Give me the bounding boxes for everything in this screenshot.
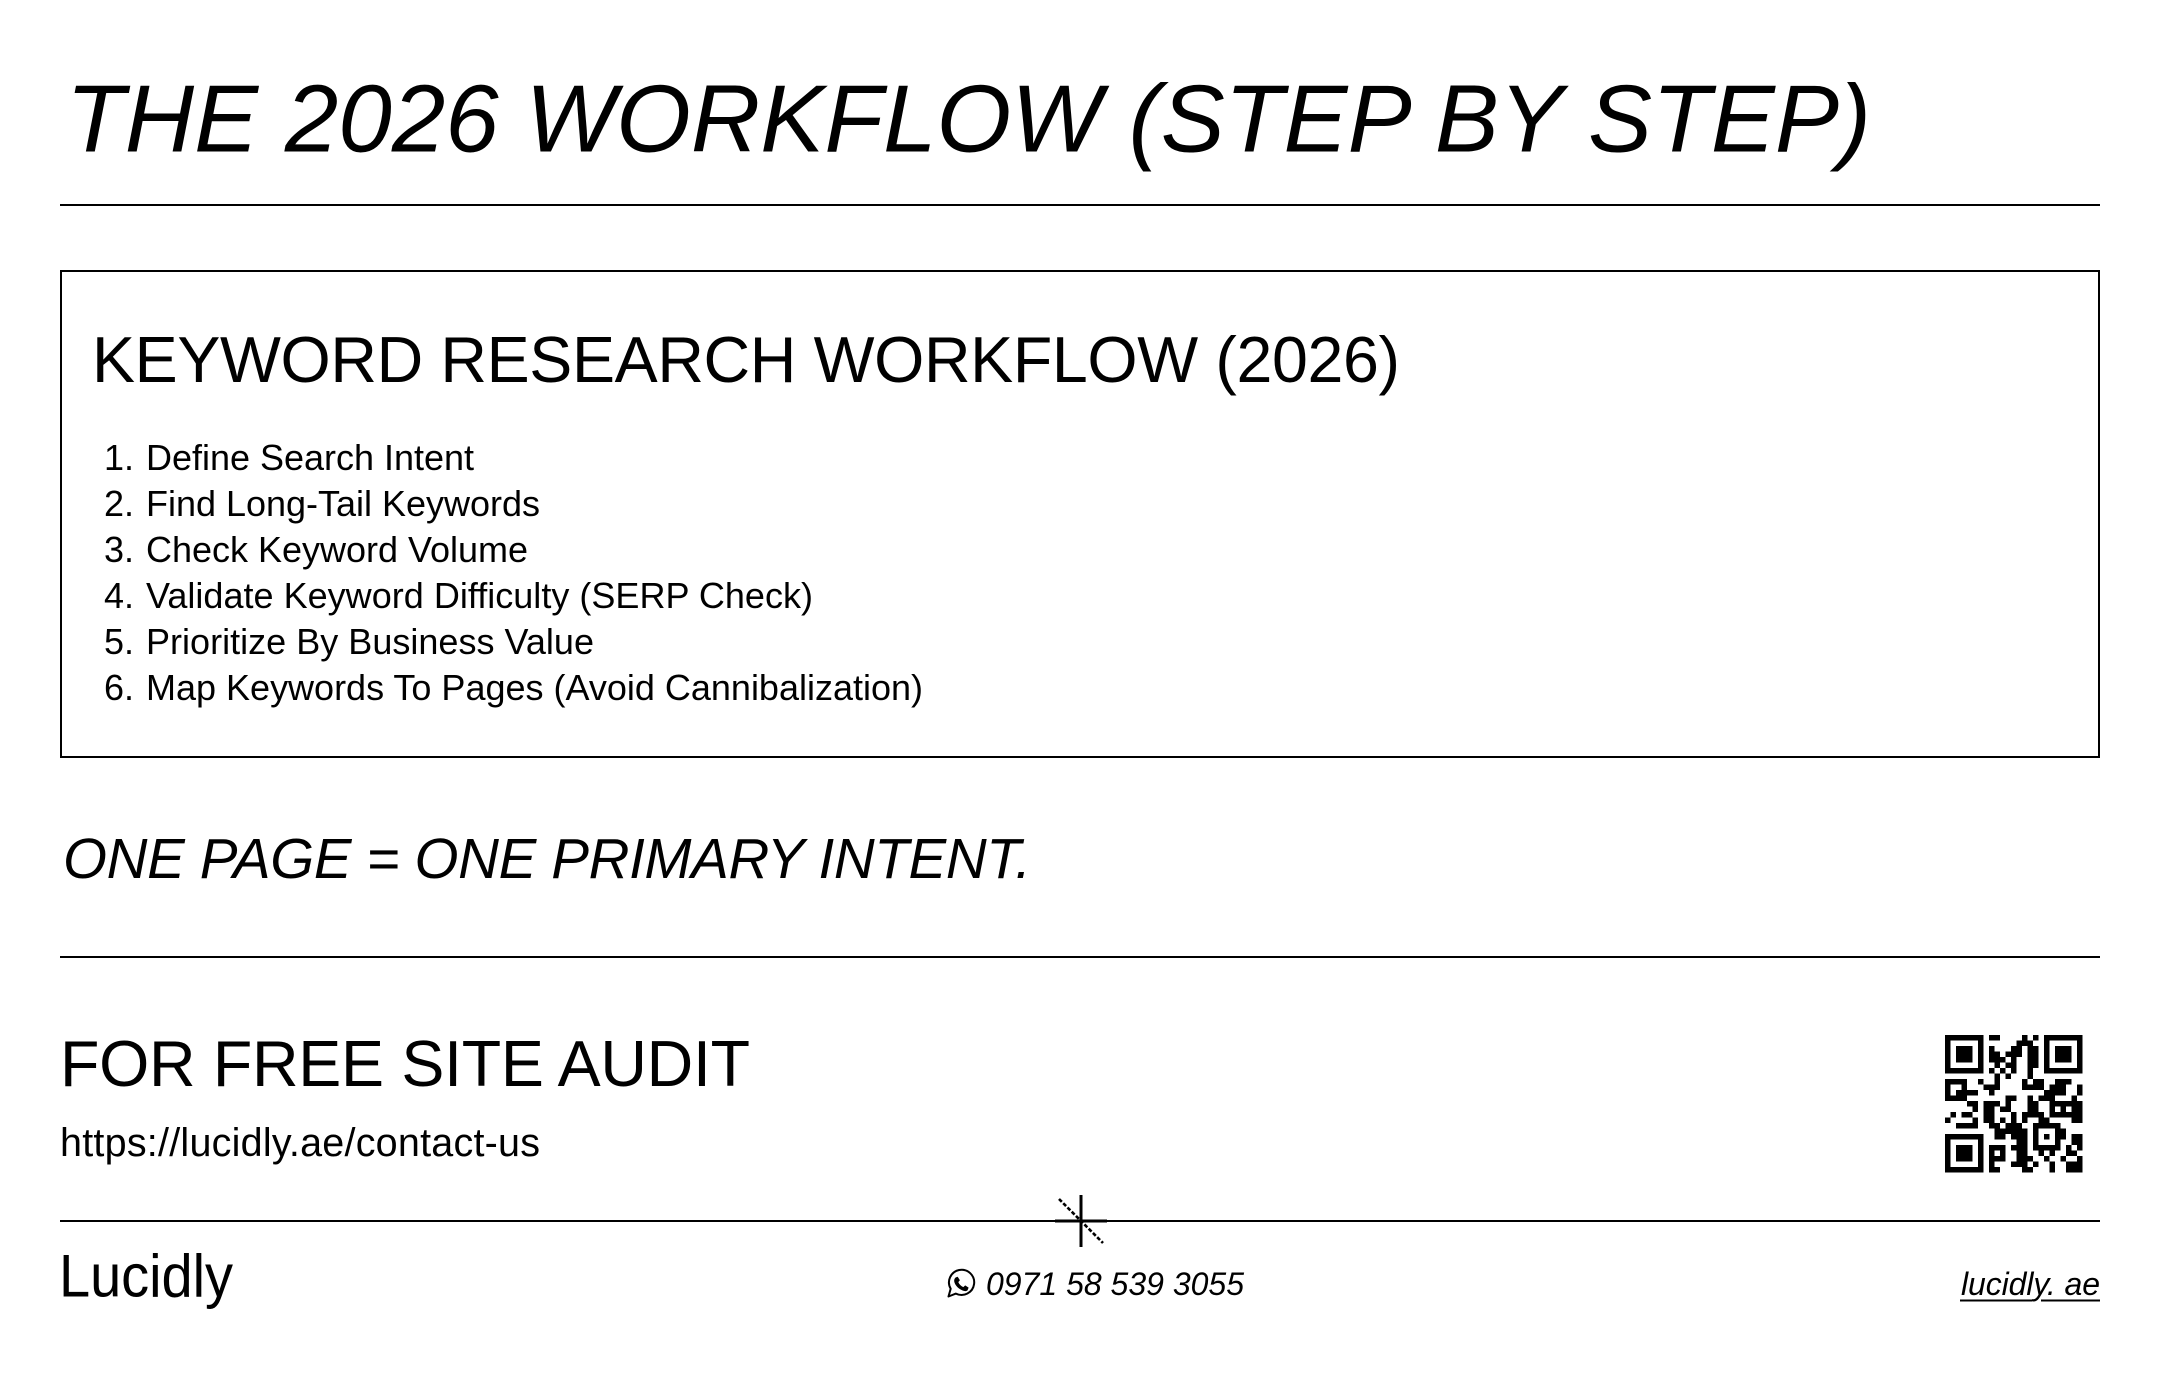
panel: keyword research workflow (61, 271, 2099, 757)
numbered list: Check Keyword Volume (146, 529, 528, 570)
numbered list: 5. (104, 621, 134, 662)
title: THE 2026 WORKFLOW (STEP BY STEP) (66, 66, 1871, 172)
numbered list: 1. (104, 437, 134, 478)
website link: lucidly. ae (1961, 1266, 2100, 1302)
phone contact (948, 1266, 1244, 1302)
numbered list: Map Keywords To Pages (Avoid Cannibalization) (146, 667, 923, 708)
contact url: https://lucidly.ae/contact-us (60, 1121, 540, 1165)
numbered list: 6. (104, 667, 134, 708)
logo: Lucidly: Lucidly (59, 1244, 233, 1310)
qr code (1945, 1038, 2082, 1170)
numbered list: Prioritize By Business Value (146, 621, 594, 662)
numbered list: 3. (104, 529, 134, 570)
numbered list: 2. (104, 483, 134, 524)
numbered list: Define Search Intent (146, 437, 474, 478)
numbered list: 4. (104, 575, 134, 616)
call to action heading: FOR FREE SITE AUDIT (60, 1028, 750, 1100)
numbered list: Validate Keyword Difficulty (SERP Check) (146, 575, 813, 616)
icon: whatsapp (948, 1270, 974, 1296)
panel heading: KEYWORD RESEARCH WORKFLOW (2026) (92, 324, 1400, 396)
numbered list (104, 437, 923, 708)
numbered list: Find Long-Tail Keywords (146, 483, 540, 524)
key takeaway statement: ONE PAGE = ONE PRIMARY INTENT. (63, 827, 1031, 890)
phone number: 0971 58 539 3055 (986, 1266, 1244, 1302)
icon: asterisk star on divider (1055, 1195, 1107, 1247)
